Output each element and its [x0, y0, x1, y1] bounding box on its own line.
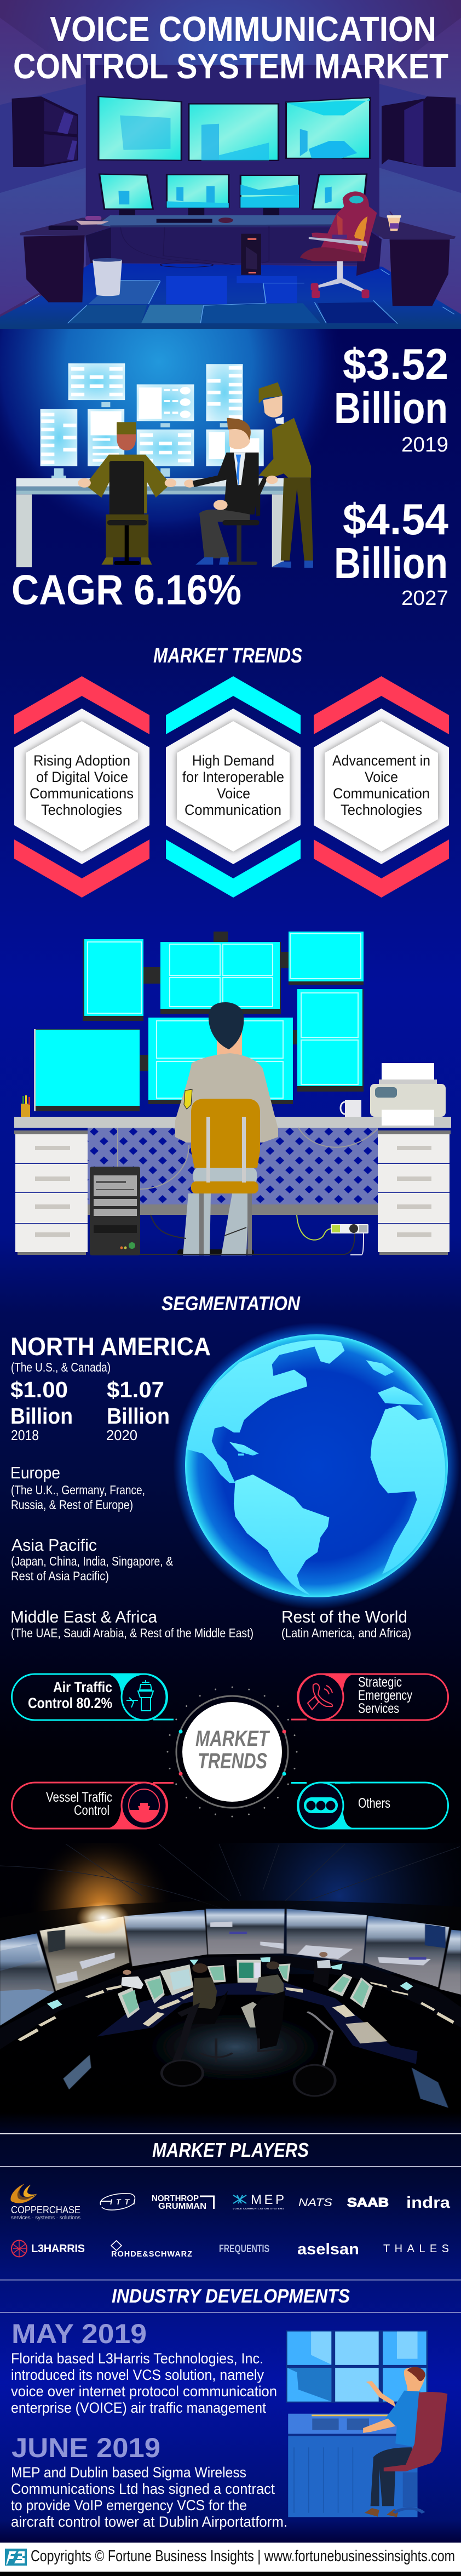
trend hexagon: digital voice	[14, 676, 149, 898]
logo: aselsan: aselsan	[297, 2241, 359, 2258]
control room illustration	[0, 0, 461, 329]
logo: sitti: ITTI	[110, 2197, 136, 2206]
panel: vessel traffic control: Control	[74, 1803, 110, 1818]
logo: copperchase: services · systems · solutions	[11, 2214, 80, 2221]
room floor with tiles	[0, 226, 461, 329]
title: VOICE COMMUNICATION	[50, 9, 436, 49]
standing soldier	[259, 382, 313, 568]
title	[13, 9, 448, 86]
icon: fortune business insights logo	[5, 2549, 27, 2566]
air traffic controller illustration	[286, 2331, 447, 2517]
trend hexagon: digital voice: of Digital Voice	[36, 769, 128, 785]
north america	[10, 1332, 211, 1443]
rest of the world: Rest of the World	[281, 1607, 407, 1626]
central circle: market trends: TRENDS	[198, 1749, 267, 1773]
development: june 2019: to provide VoIP emergency VCS for the	[11, 2497, 247, 2514]
market size 2027: 2027	[401, 587, 448, 610]
logo: copperchase	[10, 2184, 80, 2221]
pencil cup	[21, 1095, 30, 1117]
operator desk	[16, 478, 284, 567]
desk top and panel	[14, 1117, 451, 1215]
logo: northrop grumman: GRUMMAN	[158, 2202, 206, 2211]
logo: northrop grumman: NORTHROP	[152, 2194, 199, 2203]
controller figure	[363, 2367, 447, 2517]
computer tower	[90, 1167, 140, 1255]
coffee cup	[387, 212, 401, 231]
logo: mep	[233, 2192, 285, 2211]
computer tower	[241, 234, 261, 275]
development: june 2019: aircraft control tower at Dublin Airportatform.	[11, 2514, 287, 2530]
asia pacific: Rest of Asia Pacific)	[11, 1569, 109, 1583]
north america: 2018	[11, 1427, 39, 1443]
logo: nats: NATS	[298, 2197, 333, 2209]
asia pacific	[11, 1535, 173, 1583]
video wall	[34, 932, 364, 1111]
panel: vessel traffic control: Vessel Traffic	[46, 1790, 112, 1805]
operators at monitors illustration	[16, 363, 313, 568]
development: may 2019: enterprise (VOICE) air traffic management	[11, 2400, 267, 2416]
north america: 2020	[106, 1427, 137, 1443]
logo: rohde and schwarz	[111, 2241, 192, 2259]
north america: $1.07	[107, 1377, 164, 1402]
development: may 2019: voice over internet protocol communication	[11, 2383, 277, 2400]
panel: strategic emergency services: Strategic	[358, 1675, 402, 1690]
europe	[10, 1463, 145, 1512]
north america: $1.00	[10, 1377, 68, 1402]
globe	[173, 1322, 460, 1609]
monitor stands	[113, 208, 287, 222]
trend hexagon: interoperable	[166, 676, 301, 898]
shelf left	[11, 96, 78, 167]
panel: strategic emergency services: Services	[358, 1701, 399, 1716]
panel: vessel traffic control	[12, 1783, 174, 1829]
logo: sitti	[100, 2194, 136, 2210]
trend hexagon: digital voice: Technologies	[41, 802, 122, 818]
logo: indra: indra	[406, 2194, 451, 2212]
development: may 2019: introduced its novel VCS solution, namely	[11, 2367, 264, 2383]
heading: market trends: MARKET TRENDS	[153, 644, 302, 667]
trend hexagon: interoperable: High Demand	[192, 752, 274, 769]
seated soldier	[78, 422, 176, 565]
rest of the world: (Latin America, and Africa)	[281, 1626, 411, 1640]
logo: mep: VOICE COMMUNICATION SYSTEMS	[233, 2207, 285, 2211]
middle east and africa	[10, 1607, 253, 1640]
screens wall	[41, 363, 264, 478]
logo: frequentis: FREQUENTIS	[219, 2243, 269, 2255]
right drawers	[378, 1130, 451, 1255]
trend hexagon: digital voice: Rising Adoption	[33, 752, 130, 769]
logo: rohde and schwarz: ROHDE&SCHWARZ	[111, 2250, 192, 2259]
logo: copperchase: COPPERCHASE	[11, 2204, 80, 2215]
icon: three dots	[304, 1797, 338, 1813]
middle east and africa: Middle East & Africa	[10, 1607, 158, 1626]
trend hexagon: interoperable: Voice	[217, 785, 250, 802]
icon: control tower	[126, 1680, 153, 1711]
trend hexagon: advancement: Technologies	[341, 802, 422, 818]
blue glow behind operators	[0, 329, 350, 559]
corner desk and furniture	[20, 191, 456, 306]
middle east and africa: (The UAE, Saudi Arabia, & Rest of the Middle East)	[11, 1626, 253, 1640]
heading: market players: MARKET PLAYERS	[152, 2139, 309, 2161]
market size 2019	[334, 340, 448, 456]
logo: thales: THALES	[383, 2243, 449, 2255]
operator seated from behind	[175, 1002, 278, 1255]
security operator at desk illustration	[14, 932, 451, 1255]
desk items	[49, 216, 233, 230]
mug	[341, 1100, 361, 1117]
panel: strategic emergency services	[291, 1674, 448, 1720]
logo: l3harris: L3HARRIS	[31, 2243, 85, 2255]
waste bin	[93, 258, 122, 296]
icon: phone in hand	[308, 1684, 332, 1710]
CAGR: CAGR 6.16%	[11, 567, 241, 614]
development: june 2019: MEP and Dublin based Sigma Wireless	[11, 2464, 246, 2481]
trend hexagon: advancement	[314, 676, 449, 898]
wall monitors	[99, 96, 370, 209]
trend hexagon: advancement: Communication	[333, 785, 430, 802]
development: june 2019: Communications Ltd has signed a contract	[11, 2481, 275, 2497]
europe: Russia, & Rest of Europe)	[11, 1498, 133, 1512]
north america: (The U.S., & Canada)	[11, 1360, 111, 1374]
seated man in suit	[184, 418, 275, 565]
panel: others: Others	[358, 1796, 390, 1811]
photo chairs	[162, 2012, 335, 2096]
photo monitors	[47, 1957, 413, 2018]
wall and monitors group	[11, 96, 456, 222]
logo: mep: MEP	[251, 2192, 284, 2207]
trend hexagon: digital voice: Communications	[30, 785, 134, 802]
north america: NORTH AMERICA	[10, 1332, 211, 1361]
heading: segmentation: SEGMENTATION	[162, 1292, 301, 1315]
trend hexagon: advancement: Voice	[365, 769, 398, 785]
development: june 2019: JUNE 2019	[11, 2432, 160, 2463]
market size 2019: 2019	[401, 433, 448, 456]
trend hexagon: interoperable: Communication	[185, 802, 281, 818]
panel: air traffic control	[12, 1674, 174, 1720]
market size 2019: $3.52	[343, 340, 448, 389]
gaming chair	[300, 191, 377, 298]
development: may 2019	[11, 2318, 277, 2416]
footer	[0, 2543, 461, 2576]
trend hexagon: interoperable: for Interoperable	[182, 769, 284, 785]
europe: (The U.K., Germany, France,	[11, 1483, 145, 1497]
rest of the world	[281, 1607, 411, 1640]
europe: Europe	[10, 1463, 60, 1482]
printer	[370, 1063, 446, 1126]
heading: industry developments: INDUSTRY DEVELOPMENTS	[112, 2286, 350, 2307]
asia pacific: (Japan, China, India, Singapore, &	[11, 1554, 173, 1568]
development: may 2019: MAY 2019	[11, 2318, 147, 2349]
air traffic control room photo illustration	[0, 1843, 461, 2108]
shelf right	[382, 96, 456, 167]
power strip and cables	[140, 1215, 368, 1255]
logo: northrop grumman	[152, 2194, 214, 2211]
north america: Billion	[10, 1403, 73, 1429]
photo keyboards	[18, 1982, 454, 2043]
central circle: market trends	[168, 1687, 297, 1817]
icon: ship	[129, 1789, 159, 1822]
market size 2027: $4.54	[343, 495, 448, 544]
left drawers	[14, 1130, 88, 1255]
panel: strategic emergency services: Emergency	[358, 1688, 412, 1703]
panel: air traffic control: Control 80.2%	[28, 1695, 112, 1711]
market size 2027	[334, 495, 448, 610]
north america: Billion	[107, 1403, 170, 1429]
development: may 2019: Florida based L3Harris Technologies, Inc.	[11, 2350, 263, 2367]
panel: air traffic control: Air Traffic	[53, 1679, 112, 1695]
central circle: market trends: MARKET	[195, 1727, 270, 1751]
asia pacific: Asia Pacific	[11, 1535, 97, 1555]
logo: saab: SAAB	[347, 2195, 389, 2209]
trend hexagon: advancement: Advancement in	[332, 752, 430, 769]
development: june 2019	[11, 2432, 287, 2530]
photo controllers	[121, 1952, 331, 2067]
logo: l3harris	[11, 2240, 85, 2257]
panel: others	[291, 1783, 448, 1829]
